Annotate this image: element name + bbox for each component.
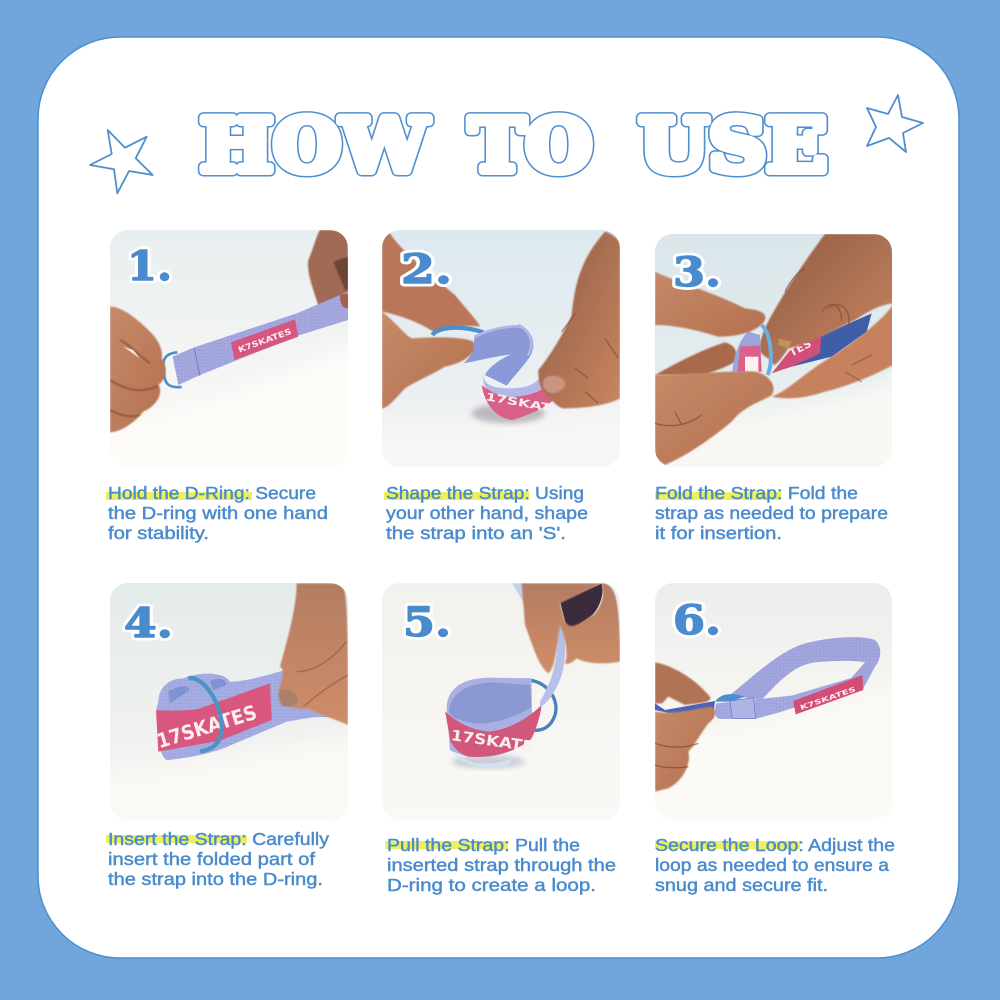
caption step 3: Fold the Strap: Fold the	[655, 483, 858, 503]
title: TO	[469, 103, 592, 189]
panel: step 5	[382, 583, 620, 895]
photo: step 6 secured loop: K7SKATES	[799, 685, 857, 712]
step number 6: 6.	[673, 597, 721, 644]
caption step 6: loop as needed to ensure a	[655, 855, 889, 875]
caption step 1: Hold the D-Ring: Secure	[108, 483, 316, 503]
caption step 6: Secure the Loop: Adjust the	[655, 835, 895, 855]
step number 4: 4.	[124, 600, 173, 647]
step number 2: 2.	[401, 246, 452, 293]
caption step 6	[655, 835, 895, 895]
caption step 2	[384, 483, 588, 543]
photo: step 6 secured loop	[655, 583, 892, 820]
panel: step 4	[106, 583, 348, 889]
photo: step 5 pulling strap: 17SKATE	[450, 727, 535, 756]
step number 3: 3.	[673, 249, 721, 296]
photo: step 1 holding D-ring: K7SKATES	[237, 327, 293, 355]
icon: right star	[867, 95, 923, 152]
photo: step 2 shaping S: 17SKAT	[484, 390, 553, 415]
caption step 1: the D-ring with one hand	[108, 503, 328, 523]
caption step 4: insert the folded part of	[108, 849, 315, 869]
caption step 1	[106, 483, 328, 543]
photo: step 2 shaping S	[382, 230, 620, 467]
caption step 2: the strap into an 'S'.	[386, 523, 566, 543]
caption step 4: the strap into the D-ring.	[108, 869, 323, 889]
step number 3: 3.	[673, 249, 721, 296]
step number 6: 6.	[673, 597, 721, 644]
photo: step 4 inserting strap	[110, 583, 348, 820]
step number 1: 1.	[127, 243, 172, 290]
caption step 4	[106, 829, 329, 889]
photo: step 3 folding strap: TES	[787, 337, 814, 359]
step number 5: 5.	[403, 599, 451, 646]
panel: step 1	[106, 230, 348, 543]
step number 1: 1.	[127, 243, 172, 290]
title	[200, 103, 827, 189]
title: HOW	[200, 103, 429, 189]
step number 4: 4.	[124, 600, 173, 647]
title: HOW	[200, 103, 429, 189]
caption step 1: for stability.	[108, 523, 209, 543]
title: TO	[469, 103, 592, 189]
title: USE	[639, 103, 827, 189]
panel: step 6	[655, 583, 894, 895]
caption step 3: strap as needed to prepare	[655, 503, 888, 523]
caption step 2: your other hand, shape	[386, 503, 588, 523]
caption step 5: D-ring to create a loop.	[387, 875, 596, 895]
photo: step 1 holding D-ring	[110, 230, 348, 434]
icon: left star	[90, 130, 153, 193]
caption step 3	[655, 483, 888, 543]
photo: step 5 pulling strap	[382, 583, 620, 820]
photo: step 4 inserting strap: 17SKATES	[154, 700, 260, 753]
caption step 5: inserted strap through the	[387, 855, 616, 875]
panel: step 2	[382, 230, 620, 543]
caption step 2: Shape the Strap: Using	[386, 483, 584, 503]
title: USE	[639, 103, 827, 189]
caption step 6: snug and secure fit.	[655, 875, 828, 895]
step number 5: 5.	[403, 599, 451, 646]
caption step 5	[385, 835, 616, 895]
panel: step 3	[655, 234, 912, 543]
photo: step 3 folding strap	[655, 234, 892, 467]
step number 2: 2.	[401, 246, 452, 293]
caption step 3: it for insertion.	[655, 523, 782, 543]
caption step 5: Pull the Strap: Pull the	[387, 835, 580, 855]
caption step 4: Insert the Strap: Carefully	[108, 829, 329, 849]
